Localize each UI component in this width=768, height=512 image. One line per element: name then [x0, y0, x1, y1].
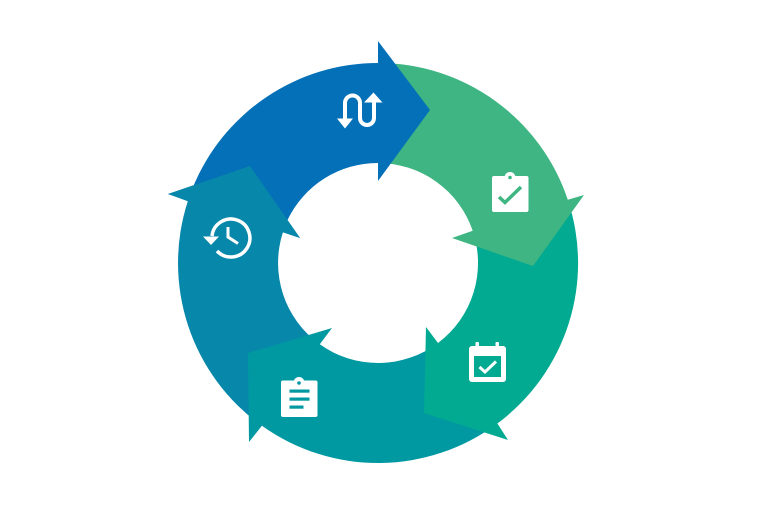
icon: up and down winding arrows	[337, 92, 382, 128]
arrow segment: sea green, lower right	[424, 200, 578, 440]
arrowhead: teal blue, over the blue segment tail	[168, 166, 300, 238]
arrow segment: teal blue, left	[168, 166, 320, 426]
icon: clipboard with check	[492, 172, 528, 212]
icon: clock with counter-clockwise history arrow	[203, 219, 250, 257]
icon: clipboard with text lines	[281, 377, 318, 417]
icon: calendar with check	[469, 342, 506, 382]
arrow segment: blue, top	[193, 41, 430, 220]
arrow segment: teal, bottom	[248, 328, 497, 463]
arrow segment: green, upper right	[378, 63, 584, 266]
